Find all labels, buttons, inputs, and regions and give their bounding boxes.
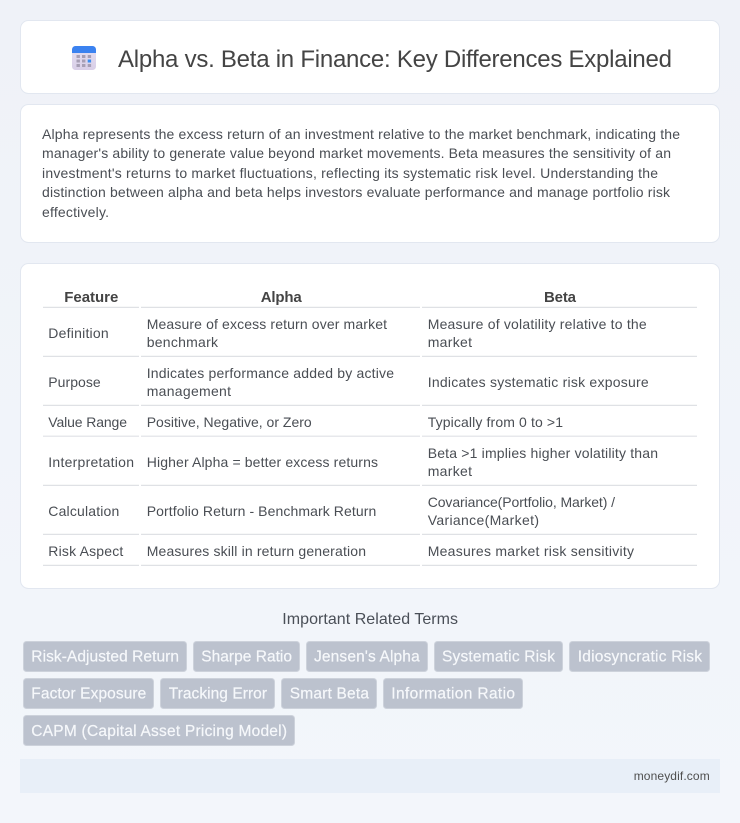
tag: capm bbox=[24, 716, 294, 746]
row: risk aspect: Measures market risk sensitivity bbox=[428, 543, 634, 559]
panel: comparison table bbox=[20, 264, 720, 588]
row: purpose: Indicates systematic risk exposure bbox=[428, 374, 649, 390]
tag: systematic risk: Systematic Risk bbox=[442, 649, 555, 666]
row: purpose: Indicates performance added by active bbox=[147, 365, 394, 381]
text block: introduction: investment's returns to market fluctuations, reflecting its systematic risk level. Understanding the bbox=[42, 165, 658, 181]
row: definition: Measure of volatility relative to the bbox=[428, 316, 647, 332]
table header bbox=[43, 289, 697, 307]
tag: tracking error bbox=[160, 678, 274, 708]
footer bbox=[20, 759, 720, 793]
text block: introduction bbox=[42, 126, 680, 220]
footer: moneydif.com bbox=[634, 769, 710, 783]
tag: information ratio bbox=[384, 678, 522, 708]
heading: important related terms: Important Related Terms bbox=[282, 611, 458, 628]
row: definition bbox=[43, 316, 697, 356]
tag: jensen's alpha: Jensen's Alpha bbox=[314, 649, 420, 666]
text block: introduction: distinction between alpha and beta helps investors evaluate performance and manage portfolio risk bbox=[42, 184, 671, 200]
tag: factor exposure bbox=[24, 678, 154, 708]
tag: information ratio: Information Ratio bbox=[391, 686, 515, 703]
tag: sharpe ratio bbox=[194, 642, 300, 672]
row: interpretation: Beta >1 implies higher volatility than bbox=[428, 445, 658, 461]
row: calculation: Variance(Market) bbox=[428, 512, 539, 528]
row: calculation: Calculation bbox=[48, 503, 119, 519]
row: interpretation: Higher Alpha = better excess returns bbox=[147, 454, 378, 470]
tag: factor exposure: Factor Exposure bbox=[31, 686, 146, 703]
tag: sharpe ratio: Sharpe Ratio bbox=[201, 649, 292, 666]
tag: smart beta: Smart Beta bbox=[290, 686, 369, 703]
tag: systematic risk bbox=[434, 642, 562, 672]
tag: capm: CAPM (Capital Asset Pricing Model) bbox=[31, 723, 287, 740]
title: Alpha vs. Beta in Finance: Key Differences Explained bbox=[118, 46, 672, 73]
text block: introduction: Alpha represents the excess return of an investment relative to the market benchmark, indicating the bbox=[42, 126, 680, 142]
tag: tracking error: Tracking Error bbox=[169, 686, 267, 703]
table header: Beta bbox=[544, 289, 577, 306]
row: value range bbox=[43, 414, 697, 436]
row: value range: Typically from 0 to >1 bbox=[428, 414, 563, 430]
text block: introduction: effectively. bbox=[42, 204, 109, 220]
row: purpose: management bbox=[147, 383, 231, 399]
table header: Feature bbox=[64, 289, 118, 306]
row: risk aspect: Measures skill in return generation bbox=[147, 543, 366, 559]
row: value range: Value Range bbox=[48, 414, 127, 430]
icon: calendar bbox=[72, 46, 96, 70]
tag: jensen's alpha bbox=[306, 642, 428, 672]
tag: idiosyncratic risk: Idiosyncratic Risk bbox=[578, 649, 702, 666]
tag: risk-adjusted return bbox=[24, 642, 186, 672]
row: calculation bbox=[43, 494, 697, 534]
row: definition: market bbox=[428, 334, 472, 350]
tag: idiosyncratic risk bbox=[570, 642, 710, 672]
row: interpretation: market bbox=[428, 463, 472, 479]
panel: introduction bbox=[20, 104, 720, 242]
tag: risk-adjusted return: Risk-Adjusted Return bbox=[31, 649, 179, 666]
table header: Alpha bbox=[261, 289, 302, 306]
tag: smart beta bbox=[282, 678, 376, 708]
row: definition: Measure of excess return over market bbox=[147, 316, 387, 332]
row: value range: Positive, Negative, or Zero bbox=[147, 414, 312, 430]
panel: header bbox=[20, 20, 720, 94]
related term tags bbox=[24, 642, 710, 746]
row: definition: benchmark bbox=[147, 334, 219, 350]
row: calculation: Portfolio Return - Benchmark Return bbox=[147, 503, 376, 519]
row: purpose bbox=[43, 365, 697, 405]
row: interpretation: Interpretation bbox=[48, 454, 134, 470]
row: risk aspect: Risk Aspect bbox=[48, 543, 123, 559]
row: risk aspect bbox=[43, 543, 697, 565]
row: purpose: Purpose bbox=[48, 374, 101, 390]
row: interpretation bbox=[43, 445, 697, 485]
text block: introduction: manager's ability to generate value beyond market movements. Beta measures the sensitivity of an bbox=[42, 145, 671, 161]
row: calculation: Covariance(Portfolio, Market) / bbox=[428, 494, 615, 510]
row: definition: Definition bbox=[48, 325, 109, 341]
